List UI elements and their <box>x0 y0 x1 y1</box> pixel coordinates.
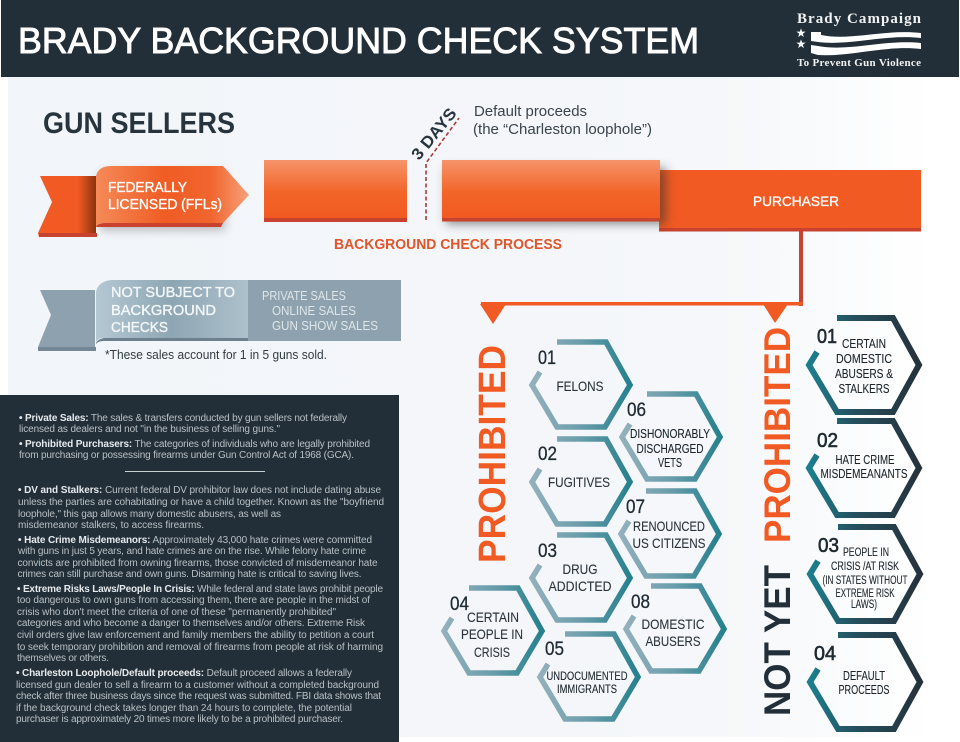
definitions panel: crisis who don't meet the criteria of one of these "permanently prohibited" <box>17 607 336 618</box>
hexagon: 04 certain people in crisis: CERTAIN <box>467 609 519 625</box>
arrow: to prohibited <box>480 304 506 324</box>
ribbon: federally licensed: FEDERALLY <box>108 180 187 196</box>
ribbon: federally licensed <box>38 166 249 237</box>
hexagon: 08 domestic abusers: 08 <box>631 592 650 613</box>
definitions panel: misdemeanor stalkers, to access firearms. <box>18 520 204 531</box>
definitions panel <box>0 395 399 742</box>
heading: not yet prohibited: PROHIBITED <box>757 327 798 543</box>
hexagon: not yet 03 people in crisis: (IN STATES WITHOUT <box>822 575 908 587</box>
hexagon: 03 drug addicted: ADDICTED <box>548 578 612 594</box>
hexagon: not yet 01 domestic abusers and stalkers: CERTAIN <box>842 336 886 351</box>
definitions panel: to seek temporary prohibition and removal of firearms from people at risk of harming <box>17 642 383 653</box>
hexagon: 06 dishonorably discharged vets: DISHONORABLY <box>630 426 710 441</box>
default proceeds note: (the “Charleston loophole”) <box>473 122 652 138</box>
definitions panel: categories and who become a danger to themselves and/or others. Extreme Risk <box>17 618 366 629</box>
hexagon: not yet 02 hate crime misdemeanants: MISDEMEANANTS <box>820 466 908 481</box>
hexagon: 08 domestic abusers <box>626 586 724 671</box>
hexagon: 06 dishonorably discharged vets <box>622 394 720 479</box>
hexagon: 05 undocumented immigrants: 05 <box>545 639 564 660</box>
purchaser box: PURCHASER <box>753 193 839 209</box>
hexagon: 02 fugitives <box>532 439 630 524</box>
hexagon: not yet 04 default proceeds: DEFAULT <box>843 668 885 683</box>
hexagon: 03 drug addicted: 03 <box>538 541 557 562</box>
footnote: *These sales account for 1 in 5 guns sold. <box>105 348 327 362</box>
hexagon: 01 felons <box>532 342 630 427</box>
logo: Brady Campaign: Brady Campaign <box>797 11 922 27</box>
hexagon: not yet 03 people in crisis: LAWS) <box>851 599 877 611</box>
hexagon: 04 certain people in crisis: 04 <box>450 594 469 615</box>
hexagon: not yet 02 hate crime misdemeanants: HATE CRIME <box>836 452 895 467</box>
background check bar 1 <box>264 160 407 222</box>
definitions panel: loophole," this gap allows many domestic abusers, as well as <box>18 509 281 520</box>
logo: Brady Campaign: ★ <box>796 26 806 40</box>
definitions panel: purchaser is approximately 20 times more likely to be a prohibited purchaser. <box>16 714 343 725</box>
hexagon: not yet 01 domestic abusers and stalkers: ABUSERS & <box>835 366 893 381</box>
definitions panel: civil orders give law enforcement and family members the ability to petition a court <box>17 630 374 641</box>
definitions panel: too dangerous to own guns from accessing them, there are people in the midst of <box>17 595 370 606</box>
hexagon: 07 renounced US citizens <box>621 491 719 576</box>
logo: Brady Campaign: ★ <box>796 37 806 51</box>
hexagon: 04 certain people in crisis: PEOPLE IN <box>461 626 523 642</box>
definitions panel: licensed as dealers and not "in the business of selling guns." <box>19 424 280 435</box>
header bar <box>1 0 959 77</box>
hexagon: 06 dishonorably discharged vets: 06 <box>627 400 646 421</box>
label: background check process: BACKGROUND CHECK PROCESS <box>334 237 562 253</box>
hexagon: not yet 01 domestic abusers and stalkers: 01 <box>817 326 837 348</box>
ribbon: not subject to background checks <box>38 280 401 351</box>
hexagon: 07 renounced US citizens: RENOUNCED <box>633 518 705 534</box>
definitions panel: • Charleston Loophole/Default proceeds: Default proceed allows a federally <box>16 668 352 679</box>
ribbon: not subject to background checks: NOT SUBJECT TO <box>111 285 235 301</box>
hexagon: 02 fugitives: 02 <box>538 444 557 465</box>
3-day dashed marker <box>426 118 459 220</box>
hexagon: 01 felons: FELONS <box>556 378 604 394</box>
hexagon: not yet 01 domestic abusers and stalkers: DOMESTIC <box>836 351 892 366</box>
hexagon: not yet 03 people in crisis <box>810 527 920 621</box>
ribbon: not subject to background checks: PRIVATE SALES <box>262 289 346 303</box>
hexagon: 05 undocumented immigrants <box>540 634 638 719</box>
logo: Brady Campaign <box>796 11 922 69</box>
hexagon: 03 drug addicted <box>532 535 630 620</box>
definitions panel: from purchasing or possessing firearms under Gun Control Act of 1968 (GCA). <box>19 450 354 461</box>
definitions panel: crimes can still purchase and own guns. Disarming hate is critical to saving lives. <box>18 569 362 580</box>
arrow: to not yet prohibited <box>763 304 788 323</box>
hexagon: not yet 01 domestic abusers and stalkers: STALKERS <box>838 381 890 396</box>
purchaser box <box>659 170 921 232</box>
heading: prohibited: PROHIBITED <box>472 345 514 563</box>
definitions panel: unless the parties are cohabitating or have a child together. Known as the "boyfriend <box>18 497 384 508</box>
definitions panel: check after three business days since the request was submitted. FBI data shows that <box>16 691 381 702</box>
default proceeds note <box>473 104 652 138</box>
background check bar 2 <box>442 160 666 224</box>
hexagon: 06 dishonorably discharged vets: VETS <box>658 455 682 470</box>
hexagon: 08 domestic abusers: DOMESTIC <box>642 616 704 632</box>
definitions panel: • Prohibited Purchasers: The categories of individuals who are legally prohibited <box>19 439 370 450</box>
hexagon: not yet 02 hate crime misdemeanants <box>809 421 919 515</box>
definitions panel: with guns in just 5 years, and hate crimes are on the rise. While felony hate crime <box>17 546 366 557</box>
hexagon: 06 dishonorably discharged vets: DISCHARGED <box>636 441 704 456</box>
ribbon: federally licensed: LICENSED (FFLs) <box>108 197 222 213</box>
hexagon: 08 domestic abusers: ABUSERS <box>646 633 700 649</box>
hexagon: 07 renounced US citizens: US CITIZENS <box>632 535 706 551</box>
definitions panel: • Hate Crime Misdemeanors: Approximately 43,000 hate crimes were committed <box>18 535 372 546</box>
heading: not yet prohibited: NOT YET <box>757 565 798 716</box>
definitions panel: • DV and Stalkers: Current federal DV prohibitor law does not include dating abuse <box>18 485 381 496</box>
definitions panel: • Extreme Risks Laws/People In Crisis: While federal and state laws prohibit people <box>17 584 383 595</box>
ribbon: not subject to background checks: BACKGROUND <box>111 303 216 319</box>
definitions panel: convicts are prohibited from owning firearms, those convicted of misdemeanor hate <box>18 558 378 569</box>
connector from purchaser to categories <box>480 231 803 324</box>
logo: Brady Campaign: To Prevent Gun Violence <box>797 57 921 69</box>
hexagon: not yet 04 default proceeds <box>810 635 920 729</box>
hexagon: 03 drug addicted: DRUG <box>562 561 598 577</box>
hexagon: 05 undocumented immigrants: IMMIGRANTS <box>557 684 617 696</box>
hexagon: 04 certain people in crisis: CRISIS <box>474 644 510 660</box>
hexagon: not yet 02 hate crime misdemeanants: 02 <box>817 430 838 452</box>
hexagon: 05 undocumented immigrants: UNDOCUMENTED <box>546 671 628 683</box>
heading: not yet prohibited <box>757 327 798 716</box>
definitions panel: licensed gun dealer to sell a firearm to a customer without a completed background <box>16 680 379 691</box>
label: 3 days: 3 DAYS <box>408 105 460 164</box>
title: BRADY BACKGROUND CHECK SYSTEM <box>18 20 699 61</box>
ribbon: not subject to background checks: GUN SHOW SALES <box>272 319 378 333</box>
hexagon: not yet 04 default proceeds: 04 <box>814 643 836 665</box>
definitions panel: themselves or others. <box>17 653 109 664</box>
hexagon: not yet 03 people in crisis: CRISIS /AT RISK <box>831 561 899 573</box>
ribbon: not subject to background checks: CHECKS <box>111 320 168 336</box>
hexagon: 02 fugitives: FUGITIVES <box>548 474 610 490</box>
hexagon: not yet 04 default proceeds: PROCEEDS <box>838 682 890 697</box>
definitions panel: • Private Sales: The sales & transfers conducted by gun sellers not federally <box>19 413 347 424</box>
default proceeds note: Default proceeds <box>474 104 587 120</box>
definitions panel: if the background check takes longer than 24 hours to complete, the potential <box>16 703 352 714</box>
hexagon: 07 renounced US citizens: 07 <box>626 497 645 518</box>
hexagon: 01 felons: 01 <box>538 348 556 369</box>
ribbon: not subject to background checks: ONLINE SALES <box>272 304 356 318</box>
hexagon: not yet 03 people in crisis: PEOPLE IN <box>843 547 889 559</box>
hexagon: not yet 01 domestic abusers and stalkers <box>809 318 919 412</box>
hexagon: not yet 03 people in crisis: 03 <box>818 535 839 557</box>
hexagon: 04 certain people in crisis <box>444 588 542 673</box>
hexagon: not yet 03 people in crisis: EXTREME RISK <box>836 588 895 600</box>
heading: gun sellers: GUN SELLERS <box>43 107 235 140</box>
